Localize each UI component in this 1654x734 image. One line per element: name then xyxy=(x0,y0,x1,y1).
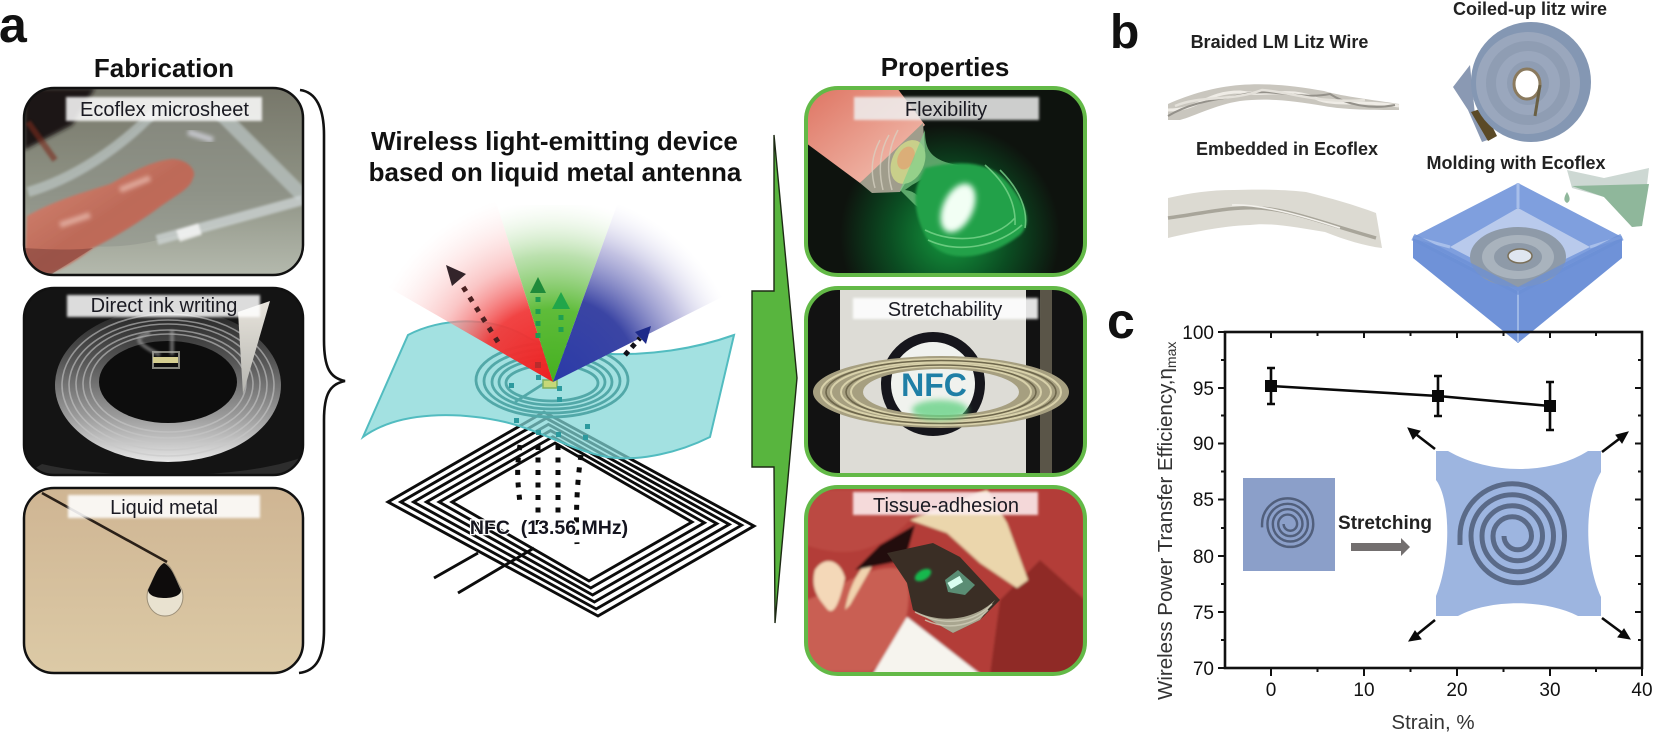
x axis tick labels: 40 xyxy=(1631,680,1653,701)
part b: heading Molding with Ecoflex: Molding with Ecoflex xyxy=(1426,153,1606,173)
y axis tick labels: 75 xyxy=(1193,603,1214,624)
label bar: Stretchability xyxy=(853,298,1038,321)
center title: based on liquid metal antenna xyxy=(369,157,742,187)
panel label b: b xyxy=(1110,6,1139,59)
y axis tick labels xyxy=(1182,323,1214,680)
arrow: stretching xyxy=(1351,538,1410,556)
label bar: Liquid metal: Liquid metal xyxy=(110,497,218,519)
heading: Properties: Properties xyxy=(881,52,1009,82)
curly brace xyxy=(299,90,345,673)
photo: wire embedded in Ecoflex xyxy=(1168,190,1382,248)
dotted field lines below sheet xyxy=(518,445,581,544)
panel: Tissue-adhesion photo xyxy=(806,487,1085,674)
y axis title: max xyxy=(1163,342,1179,368)
light cones: red, green, blue xyxy=(353,150,760,382)
x axis tick labels: 30 xyxy=(1539,680,1561,701)
inset: unstretched antenna square xyxy=(1243,478,1335,571)
icon: funnel pouring Ecoflex xyxy=(1564,168,1649,227)
y axis tick labels: 100 xyxy=(1182,323,1214,344)
x axis tick labels: 10 xyxy=(1353,680,1375,701)
x axis tick labels xyxy=(1266,680,1653,701)
label bar: Tissue-adhesion: Tissue-adhesion xyxy=(873,495,1019,517)
photo: braided wire xyxy=(1168,84,1399,120)
stretchable sheet xyxy=(363,321,734,458)
panel label c: c xyxy=(1107,293,1135,349)
label bar: Direct ink writing: Direct ink writing xyxy=(91,295,237,317)
label bar: Stretchability: Stretchability xyxy=(888,299,1002,321)
Stretching label: Stretching xyxy=(1338,513,1432,534)
y axis tick labels: 70 xyxy=(1193,659,1214,680)
panel: Stretchability photo: NFC xyxy=(901,367,967,403)
NFC frequency label: NFC (13.56 MHz) xyxy=(470,517,628,539)
photo: coiled-up litz wire xyxy=(1453,22,1591,142)
arrow: red light xyxy=(446,265,541,368)
arrow: green light, left xyxy=(530,277,546,338)
part b: heading Braided LM Litz Wire: Braided LM Litz Wire xyxy=(1191,32,1368,52)
plot frame and ticks xyxy=(1218,332,1642,676)
arrow: blue light xyxy=(625,326,651,355)
line chart: wireless power transfer efficiency versus strain xyxy=(1154,323,1653,734)
y axis tick labels: 90 xyxy=(1193,434,1214,455)
heading: Fabrication: Fabrication xyxy=(94,53,234,83)
label bar: Flexibility: Flexibility xyxy=(905,99,987,121)
panel: Liquid metal photo xyxy=(24,488,303,673)
arrow: green light, right xyxy=(552,292,570,332)
x axis tick labels: 20 xyxy=(1446,680,1468,701)
x axis title: Strain, % xyxy=(1391,711,1475,734)
y axis tick labels: 95 xyxy=(1193,379,1214,400)
panel: Flexibility photo xyxy=(806,88,1085,275)
panel: Ecoflex microsheet photo xyxy=(24,88,303,275)
inset: stretched antenna xyxy=(1436,451,1601,616)
label bar: Tissue-adhesion xyxy=(853,492,1038,517)
panel: Direct ink writing photo xyxy=(24,288,303,475)
y axis title: Wireless Power Transfer Efficiency,η xyxy=(1154,368,1177,700)
light-emitting antenna on sheet xyxy=(476,343,628,417)
label bar: Flexibility xyxy=(854,97,1039,121)
illustration: molding box with Ecoflex xyxy=(1413,183,1622,343)
x axis tick labels: 0 xyxy=(1266,680,1276,701)
stretched antenna band xyxy=(813,356,1069,428)
data series with error bars xyxy=(1265,368,1556,430)
panel: Stretchability photo xyxy=(806,288,1085,475)
arrows: stretch directions xyxy=(1408,428,1630,641)
teal dots on sheet xyxy=(509,375,590,440)
y axis tick labels: 80 xyxy=(1193,547,1214,568)
y axis tick labels: 85 xyxy=(1193,490,1214,511)
center title: Wireless light-emitting device xyxy=(371,126,738,156)
center title xyxy=(369,126,742,187)
arrow: fabrication to properties xyxy=(752,135,797,623)
liquid metal droplet xyxy=(147,563,183,616)
NFC transmit coil xyxy=(388,412,754,616)
label bar: Liquid metal xyxy=(68,495,260,519)
label bar: Ecoflex microsheet: Ecoflex microsheet xyxy=(80,99,249,121)
part b: heading Embedded in Ecoflex: Embedded in Ecoflex xyxy=(1196,139,1378,159)
